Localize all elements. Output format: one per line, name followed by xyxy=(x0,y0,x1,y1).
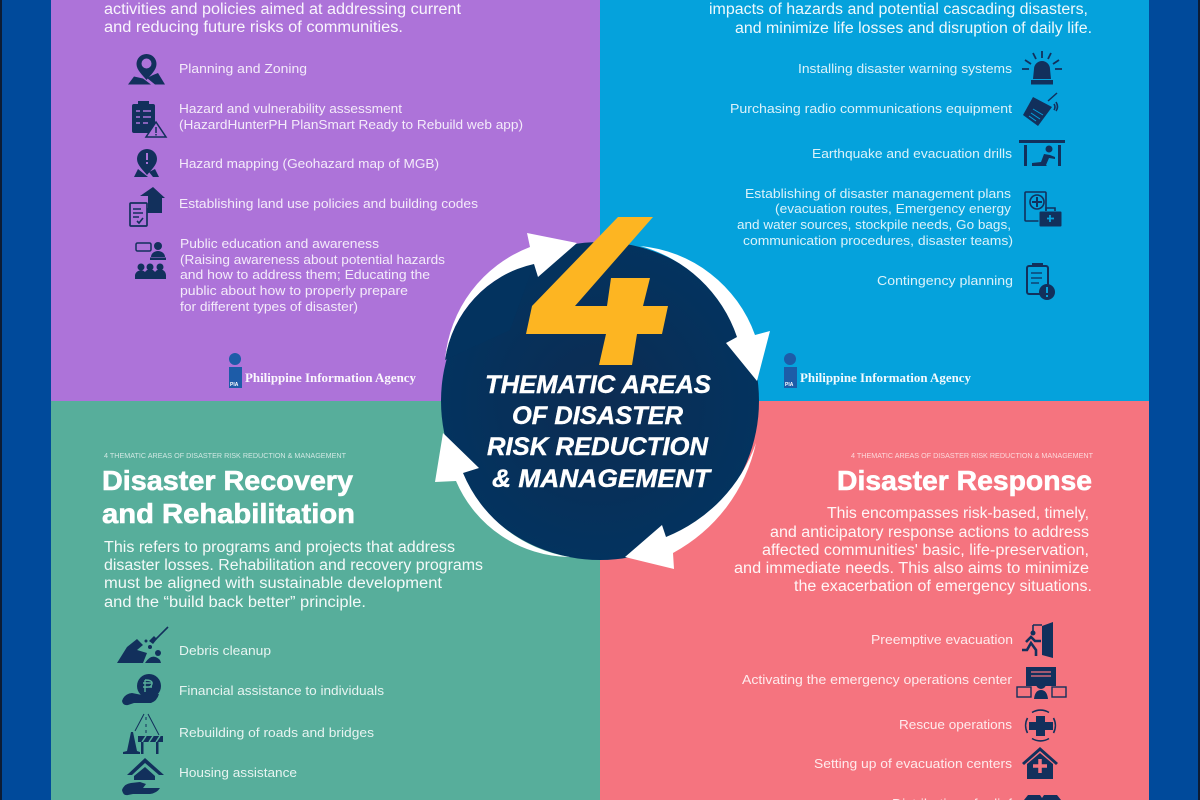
heading: and Rehabilitation xyxy=(102,498,355,529)
icon: hand radio xyxy=(1023,93,1058,126)
icon: house with cross xyxy=(1022,747,1058,779)
item: management plans: and water sources, stockpile needs, Go bags, xyxy=(737,217,1011,232)
panel description: must be aligned with sustainable development xyxy=(104,575,443,592)
item: debris cleanup: Debris cleanup xyxy=(179,643,271,658)
central badge xyxy=(435,217,770,569)
panel description: and immediate needs. This also aims to minimize xyxy=(734,560,1089,577)
icon: hazard map pin xyxy=(134,149,159,177)
icon: medical plan and bag xyxy=(1025,192,1062,227)
icon: person under table xyxy=(1019,140,1065,166)
item: financial assistance: Financial assistance to individuals xyxy=(179,683,385,698)
logo: philippine information agency: PIA xyxy=(785,382,794,388)
item: public education: Public education and awareness xyxy=(180,236,380,251)
panel description: activities and policies aimed at addressing current xyxy=(104,1,462,18)
arrow: bottom left xyxy=(435,433,570,557)
item: radio equipment: Purchasing radio communications equipment xyxy=(730,101,1012,116)
icon: rescue cross xyxy=(1026,710,1055,741)
panel description: and minimize life losses and disruption of daily life. xyxy=(735,20,1092,37)
logo: philippine information agency: Philippine Information Agency xyxy=(245,371,417,385)
item: land use: Establishing land use policies and building codes xyxy=(179,196,479,211)
badge circle xyxy=(441,242,759,560)
panel description: and anticipatory response actions to address xyxy=(770,524,1089,541)
item: evacuation centers: Setting up of evacuation centers xyxy=(814,756,1013,771)
item: public education xyxy=(180,236,446,314)
panel description: impacts of hazards and potential cascading disasters, xyxy=(709,1,1088,18)
item: hazard assessment xyxy=(179,101,523,132)
icon: house and document xyxy=(130,187,165,226)
icon: debris and shovel xyxy=(117,627,168,663)
item: hazard mapping: Hazard mapping (Geohazard map of MGB) xyxy=(179,156,439,171)
eyebrow: 4 THEMATIC AREAS OF DISASTER RISK REDUCTION & MANAGEMENT xyxy=(104,453,347,460)
panel description: This encompasses risk-based, timely, xyxy=(827,505,1089,522)
item: management plans xyxy=(737,186,1013,248)
item: hazard assessment: Hazard and vulnerability assessment xyxy=(179,101,402,116)
icon: hand with house xyxy=(122,758,164,795)
panel description: affected communities' basic, life-preservation, xyxy=(762,542,1089,559)
left border band xyxy=(0,0,51,800)
icon: clipboard alert xyxy=(1027,263,1055,300)
panel description xyxy=(709,1,1092,37)
item: hazard assessment: (HazardHunterPH PlanSmart Ready to Rebuild web app) xyxy=(179,117,523,132)
item: housing assistance: Housing assistance xyxy=(179,765,297,780)
item: preemptive evacuation: Preemptive evacuation xyxy=(871,632,1013,647)
item: planning and zoning: Planning and Zoning xyxy=(179,61,307,76)
arrow: bottom right xyxy=(625,443,756,569)
item: management plans: Establishing of disaster management plans xyxy=(745,186,1012,201)
badge title: RISK REDUCTION xyxy=(487,433,709,461)
panel description xyxy=(104,539,483,611)
badge title: THEMATIC AREAS xyxy=(485,371,711,399)
logo: philippine information agency xyxy=(784,353,972,388)
item: drills: Earthquake and evacuation drills xyxy=(812,146,1013,161)
panel: disaster recovery and rehabilitation xyxy=(51,401,600,800)
right border band xyxy=(1149,0,1200,800)
heading: Disaster Response xyxy=(837,465,1092,496)
panel description: and the “build back better” principle. xyxy=(104,594,366,611)
icon: exit door xyxy=(1022,622,1053,658)
icon: operations center xyxy=(1017,667,1066,699)
item: public education: (Raising awareness about potential hazards xyxy=(180,252,446,267)
logo: philippine information agency: Philippine Information Agency xyxy=(800,371,972,385)
badge title xyxy=(485,371,713,493)
item: public education: for different types of disaster) xyxy=(180,299,358,314)
heading: Disaster Recovery xyxy=(102,465,353,496)
icon: checklist with warning xyxy=(132,101,166,137)
icon: alarm beacon xyxy=(1022,51,1062,84)
icon: map pin xyxy=(128,54,165,84)
icon: hand with peso coin xyxy=(122,674,161,705)
number four xyxy=(526,217,668,365)
item: rebuilding: Rebuilding of roads and bridges xyxy=(179,725,375,740)
panel description: and reducing future risks of communities. xyxy=(104,19,403,36)
icon: road and barrier xyxy=(123,714,163,754)
panel description: disaster losses. Rehabilitation and recovery programs xyxy=(104,557,483,574)
panel: disaster prevention and mitigation xyxy=(51,0,600,401)
badge title: & MANAGEMENT xyxy=(492,465,713,493)
item: management plans: communication procedures, disaster teams) xyxy=(743,233,1013,248)
item: management plans: (evacuation routes, Emergency energy xyxy=(775,201,1012,216)
item: warning systems: Installing disaster warning systems xyxy=(798,61,1013,76)
heading xyxy=(102,465,355,529)
panel description xyxy=(734,505,1092,595)
item: public education: public about how to properly prepare xyxy=(180,283,408,298)
icon: public education audience xyxy=(135,242,166,279)
item: public education: and how to address them; Educating the xyxy=(180,267,430,282)
panel description xyxy=(104,1,462,36)
badge title: OF DISASTER xyxy=(512,402,683,430)
panel description: This refers to programs and projects that address xyxy=(104,539,455,556)
icon: relief box xyxy=(1024,795,1061,800)
logo: philippine information agency: PIA xyxy=(230,382,239,388)
arrow: top right xyxy=(640,246,770,381)
eyebrow: 4 THEMATIC AREAS OF DISASTER RISK REDUCTION & MANAGEMENT xyxy=(851,453,1094,460)
item: emergency operations center: Activating the emergency operations center xyxy=(742,672,1013,687)
item: rescue operations: Rescue operations xyxy=(899,717,1013,732)
panel: disaster response xyxy=(600,401,1149,800)
logo: philippine information agency xyxy=(229,353,417,388)
arrow: top left xyxy=(445,233,577,360)
panel: disaster preparedness xyxy=(600,0,1149,401)
item: contingency: Contingency planning xyxy=(877,273,1013,288)
panel description: the exacerbation of emergency situations. xyxy=(794,578,1092,595)
